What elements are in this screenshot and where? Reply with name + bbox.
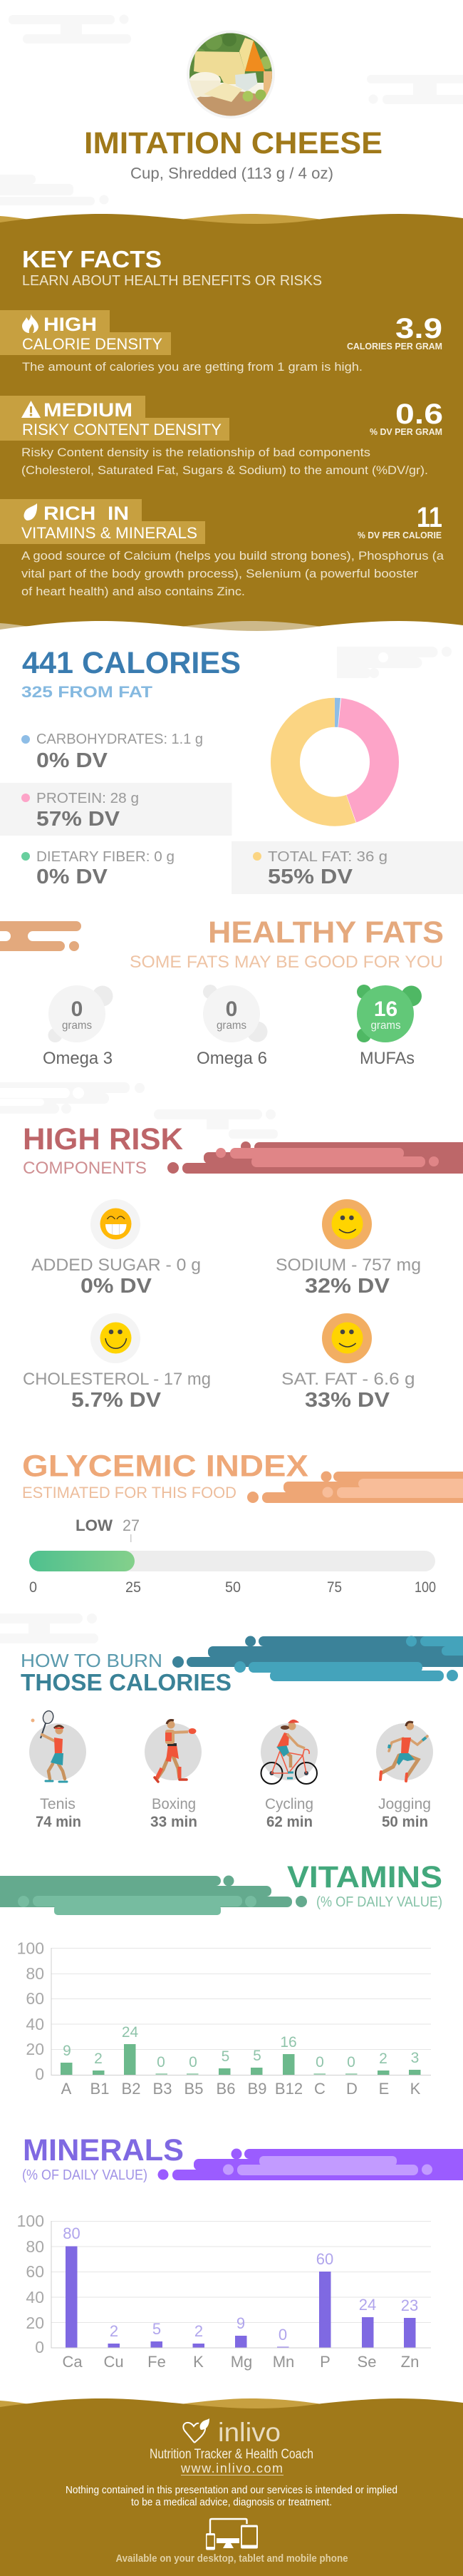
heading: those calories: THOSE CALORIES: [21, 1669, 232, 1695]
gauge: glycemic index: 0: [29, 1579, 37, 1596]
bar chart: minerals: 5: [152, 2320, 161, 2338]
panel: footer: [0, 2398, 463, 2576]
heading: high risk: HIGH RISK: [23, 1122, 183, 1156]
bar chart: vitamins: B1: [90, 2080, 109, 2098]
icon: tennis player: [29, 1710, 86, 1782]
disclaimer: [66, 2484, 397, 2508]
bar chart: minerals: K: [193, 2353, 204, 2371]
bar chart: vitamins: 40: [26, 2015, 44, 2033]
icon: leaf: [24, 503, 37, 520]
bar chart: vitamins: 20: [26, 2040, 44, 2058]
description: (Cholesterol, Saturated Fat, Sugars & Sodium) to the amount (%DV/gr).: [21, 464, 428, 477]
component: added sugar: ADDED SUGAR - 0 g: [31, 1256, 201, 1275]
description: The amount of calories you are getting from 1 gram is high.: [22, 361, 363, 374]
description: Risky Content density is the relationship of bad components: [21, 446, 370, 459]
logo: inlivo heart: [183, 2418, 209, 2443]
decorative blob: burn: [172, 1636, 463, 1681]
bar chart: vitamins: E: [379, 2080, 389, 2098]
bar chart: vitamins: 5: [222, 2048, 229, 2065]
activity: tennis: 74 min: [36, 1814, 81, 1830]
row: protein: PROTEIN: 28 g: [36, 791, 139, 806]
decorative blob: healthy fats: [0, 921, 81, 951]
row: total fat: [232, 841, 463, 894]
bar chart: vitamins: 2: [94, 2051, 103, 2067]
icon: cyclist: [261, 1720, 318, 1784]
rating: high: HIGH: [43, 314, 97, 335]
component: sodium: SODIUM - 757 mg: [276, 1256, 421, 1275]
background blob: burn calories: [0, 1613, 98, 1643]
bar chart: vitamins: 0: [316, 2054, 324, 2070]
unit: % dv per calorie: % DV PER CALORIE: [358, 530, 442, 540]
component: added sugar: [31, 1199, 201, 1298]
row: total fat: 55% DV: [268, 866, 353, 888]
bar chart: minerals: Ca: [62, 2353, 83, 2371]
stat: omega 6: Omega 6: [197, 1049, 267, 1068]
bar chart: minerals: 80: [26, 2237, 44, 2256]
panel: high risk: [23, 1122, 463, 1412]
value: 11: 11: [417, 502, 442, 533]
subheading: (% OF DAILY VALUE): [316, 1894, 442, 1910]
stat: omega 3: grams: [62, 1020, 92, 1032]
bar chart: minerals: Mg: [231, 2353, 252, 2371]
bar chart: minerals: 40: [26, 2288, 44, 2306]
heading: how to burn: HOW TO BURN: [21, 1650, 162, 1671]
panel: glycemic index: [22, 1449, 463, 1596]
component: added sugar: 0% DV: [80, 1275, 152, 1298]
stat: mufas: MUFAs: [360, 1049, 415, 1068]
background blobs: high risk: [0, 1082, 278, 1139]
bar chart: vitamins: B6: [217, 2080, 235, 2098]
panel: vitamins: [0, 1860, 442, 2098]
decorative blob: minerals: [158, 2149, 463, 2180]
activity: boxing: [145, 1720, 202, 1830]
bar chart: minerals: 80: [63, 2225, 80, 2242]
serving size subtitle: Cup, Shredded (113 g / 4 oz): [130, 164, 333, 183]
stat: omega 6: grams: [217, 1020, 246, 1032]
donut chart: macronutrients: [285, 712, 385, 811]
availability note: Available on your desktop, tablet and mobile phone: [115, 2552, 348, 2565]
wave: top of footer: [0, 2398, 463, 2576]
heading: key facts: KEY FACTS: [22, 246, 162, 272]
bar chart: vitamins: 0: [347, 2054, 355, 2070]
bar chart: minerals: 23: [401, 2297, 418, 2314]
food photo: cheese board: [187, 30, 275, 118]
component: cholesterol: 5.7% DV: [71, 1389, 162, 1412]
heading: healthy fats: HEALTHY FATS: [208, 915, 444, 950]
bar chart: vitamins: 60: [26, 1989, 44, 2008]
fact: risky content density: [0, 396, 443, 477]
icon: jogger: [376, 1722, 433, 1781]
gauge: glycemic index: 25: [125, 1579, 141, 1596]
icon: grinning face: [90, 1199, 140, 1249]
bar chart: minerals: P: [320, 2353, 331, 2371]
component: saturated fat: SAT. FAT - 6.6 g: [281, 1370, 415, 1389]
description: [21, 550, 444, 598]
gauge: glycemic index: 75: [327, 1579, 342, 1596]
panel: calories: [0, 646, 463, 894]
icon: smiling face: [322, 1199, 372, 1249]
row: protein: [0, 783, 232, 836]
activity: jogging: 50 min: [382, 1814, 428, 1830]
bar chart: minerals: Cu: [103, 2353, 124, 2371]
bar chart: minerals: Se: [358, 2353, 376, 2371]
label: vitamins and minerals: VITAMINS & MINERALS: [21, 524, 197, 542]
wave: bottom of key facts: [0, 621, 463, 636]
activity: cycling: [261, 1720, 318, 1830]
stat: mufas: grams: [370, 1020, 400, 1032]
disclaimer: Nothing contained in this presentation and our services is intended or implied: [66, 2484, 397, 2496]
bar chart: minerals: 0: [35, 2338, 44, 2356]
component: saturated fat: 33% DV: [305, 1389, 390, 1412]
bar chart: vitamins: 2: [379, 2051, 387, 2067]
bar chart: vitamins: 80: [26, 1964, 44, 1983]
rating: medium: MEDIUM: [43, 399, 132, 421]
bar chart: vitamins: B3: [153, 2080, 172, 2098]
bar chart: vitamins: B12: [275, 2080, 303, 2098]
panel: minerals: [17, 2133, 463, 2371]
activity: tennis: [29, 1710, 86, 1830]
fact: calorie density: [0, 310, 442, 374]
row: carbohydrates: [21, 732, 203, 772]
icon: smiling face: [322, 1313, 372, 1363]
activity: boxing: 33 min: [150, 1814, 197, 1830]
icon: warning triangle: [21, 401, 41, 418]
bar chart: minerals: 60: [316, 2250, 333, 2268]
component: cholesterol: [23, 1313, 211, 1412]
subheading: SOME FATS MAY BE GOOD FOR YOU: [130, 953, 443, 972]
gauge: glycemic index: [29, 1534, 436, 1596]
row: protein: 57% DV: [36, 808, 120, 831]
activity: tennis: Tenis: [40, 1796, 76, 1812]
activity: cycling: 62 min: [266, 1814, 313, 1830]
bar chart: vitamins: 0: [35, 2065, 44, 2083]
subheading: (% OF DAILY VALUE): [22, 2167, 147, 2183]
stat: mufas: 16: [374, 997, 397, 1021]
subheading: ESTIMATED FOR THIS FOOD: [22, 1484, 236, 1502]
label: low: LOW: [76, 1517, 113, 1534]
bar chart: vitamins: [17, 1939, 431, 2098]
activity: jogging: Jogging: [378, 1796, 431, 1812]
heading: 441 calories: 441 CALORIES: [22, 646, 241, 680]
bar chart: minerals: Mn: [273, 2353, 294, 2371]
icon: boxer: [145, 1720, 202, 1782]
row: dietary fiber: [21, 849, 175, 888]
heading: minerals: MINERALS: [23, 2133, 184, 2167]
component: sodium: [276, 1199, 421, 1298]
row: total fat: TOTAL FAT: 36 g: [268, 849, 387, 865]
value: 3.9: 3.9: [395, 313, 442, 344]
description: vital part of the body growth process), Selenium (a powerful booster: [21, 568, 419, 580]
icon: smiling face: [90, 1313, 140, 1363]
bar chart: vitamins: 0: [157, 2054, 165, 2070]
bar chart: vitamins: 16: [280, 2034, 297, 2051]
label: calorie density: CALORIE DENSITY: [22, 335, 162, 353]
logo wordmark: inlivo: [218, 2418, 281, 2447]
bar chart: minerals: 20: [26, 2314, 44, 2332]
stat: mufas: [357, 985, 422, 1068]
bar chart: vitamins: A: [61, 2080, 72, 2098]
bar chart: minerals: Fe: [147, 2353, 166, 2371]
activity: cycling: Cycling: [265, 1796, 313, 1812]
stat: omega 3: [43, 985, 113, 1068]
subheading: components: COMPONENTS: [23, 1159, 147, 1178]
row: dietary fiber: 0% DV: [36, 866, 108, 888]
row: carbohydrates: 0% DV: [36, 749, 108, 772]
stat: omega 6: [197, 985, 268, 1068]
bar chart: minerals: [17, 2212, 431, 2371]
component: cholesterol: CHOLESTEROL - 17 mg: [23, 1370, 211, 1389]
gauge: glycemic index: 50: [225, 1579, 241, 1596]
bar chart: vitamins: 9: [63, 2043, 71, 2059]
bar chart: vitamins: K: [410, 2080, 421, 2098]
stat: omega 6: 0: [226, 997, 237, 1021]
label: risky content density: RISKY CONTENT DENSITY: [22, 421, 222, 438]
bar chart: minerals: 2: [110, 2322, 118, 2340]
value: 27: 27: [123, 1517, 140, 1534]
panel: healthy fats: [0, 915, 444, 1068]
decorative blob: high risk: [167, 1141, 463, 1174]
bar chart: vitamins: B5: [184, 2080, 203, 2098]
activity: jogging: [376, 1722, 433, 1830]
bar chart: vitamins: 5: [253, 2048, 261, 2064]
title: IMITATION CHEESE: [84, 126, 383, 160]
component: sodium: 32% DV: [305, 1275, 390, 1298]
stat: omega 3: Omega 3: [43, 1049, 113, 1068]
subheading: from fat: 325 FROM FAT: [21, 683, 153, 701]
bar chart: vitamins: B2: [122, 2080, 140, 2098]
bar chart: vitamins: 100: [17, 1939, 44, 1958]
rating: rich in: RICH IN: [43, 503, 129, 524]
description: [21, 446, 428, 477]
bar chart: minerals: 100: [17, 2212, 44, 2230]
bar chart: minerals: 0: [279, 2326, 287, 2344]
bar chart: minerals: 9: [236, 2314, 245, 2332]
bar chart: vitamins: 3: [411, 2050, 419, 2066]
description: A good source of Calcium (helps you build strong bones), Phosphorus (a: [21, 550, 444, 563]
bar chart: vitamins: B9: [248, 2080, 266, 2098]
decorative blob: glycemic index: [247, 1472, 463, 1503]
unit: % dv per gram: % DV PER GRAM: [370, 427, 442, 437]
row: dietary fiber: DIETARY FIBER: 0 g: [36, 849, 175, 865]
bar chart: minerals: 60: [26, 2262, 44, 2281]
icon: flame: [22, 314, 38, 333]
unit: calories per gram: CALORIES PER GRAM: [347, 342, 442, 351]
bar chart: minerals: 2: [194, 2322, 203, 2340]
subheading: LEARN ABOUT HEALTH BENEFITS OR RISKS: [22, 273, 322, 289]
website link: www.inlivo.com: [180, 2461, 283, 2475]
fact: rich in vitamins and minerals: [0, 499, 444, 598]
description: of heart health) and also contains Zinc.: [21, 585, 245, 598]
value: 0.6: 0.6: [395, 399, 443, 430]
bar chart: minerals: 24: [359, 2296, 376, 2314]
icon: devices: [206, 2519, 258, 2550]
background blob: calories: [337, 647, 452, 678]
bar chart: vitamins: 24: [122, 2024, 138, 2041]
bar chart: minerals: Zn: [401, 2353, 419, 2371]
disclaimer: to be a medical advice, diagnosis or treatment.: [131, 2496, 332, 2508]
heading: vitamins: VITAMINS: [287, 1860, 442, 1894]
wave: top of key facts: [0, 214, 463, 230]
tagline: Nutrition Tracker & Health Coach: [150, 2447, 313, 2462]
activity: boxing: Boxing: [152, 1796, 196, 1812]
component: saturated fat: [281, 1313, 415, 1412]
panel: key facts: [0, 214, 463, 636]
gauge: glycemic index: 100: [415, 1579, 436, 1596]
decorative blob: vitamins: [0, 1875, 307, 1915]
panel: how to burn those calories: [21, 1636, 463, 1830]
bar chart: vitamins: C: [314, 2080, 326, 2098]
stat: omega 3: 0: [71, 997, 83, 1021]
bar chart: vitamins: 0: [189, 2054, 197, 2070]
bar chart: vitamins: D: [346, 2080, 358, 2098]
heading: glycemic index: GLYCEMIC INDEX: [22, 1449, 308, 1483]
row: carbohydrates: CARBOHYDRATES: 1.1 g: [36, 732, 203, 747]
background blobs: header: [0, 14, 463, 205]
